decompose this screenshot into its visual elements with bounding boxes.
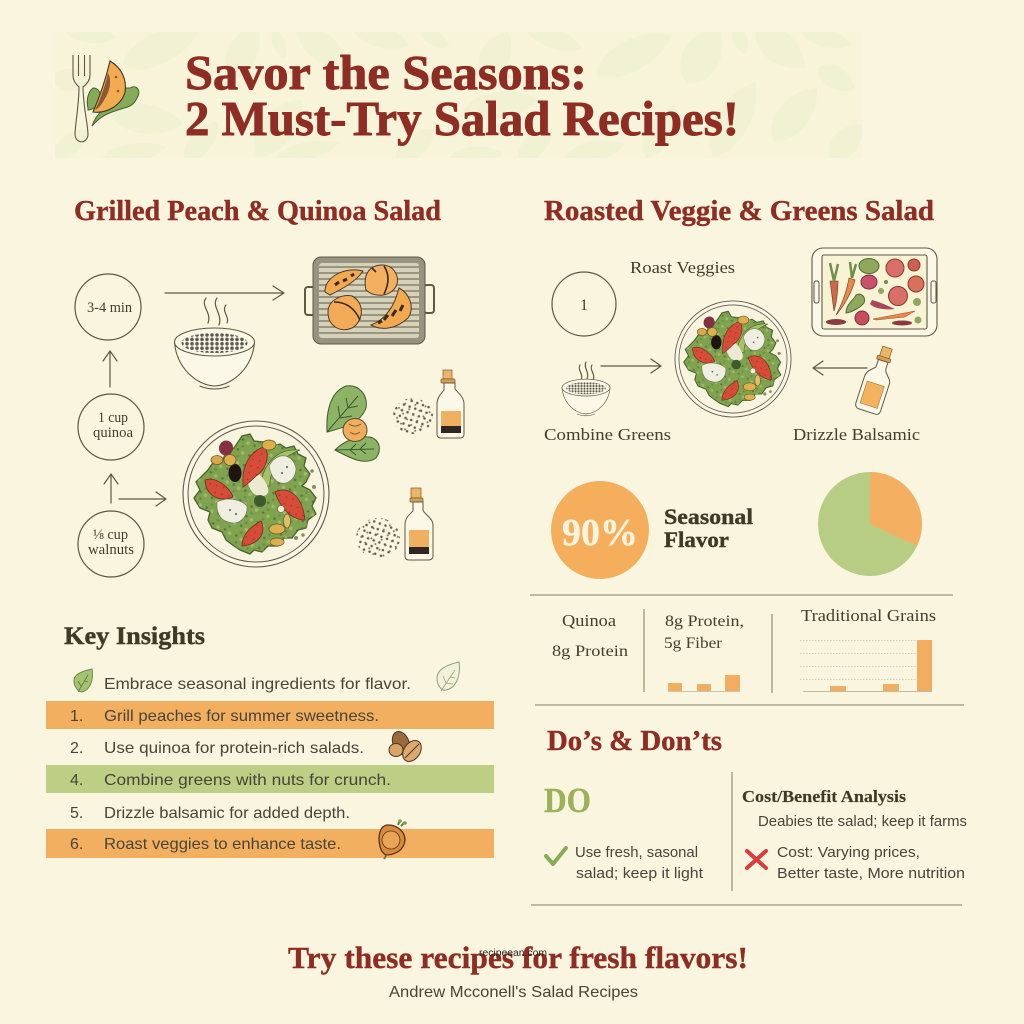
icon: steaming quinoa bowl — [174, 298, 254, 389]
title: Savor the Seasons: — [185, 45, 587, 100]
step circle: 3-4 min — [75, 274, 141, 340]
icon: small quinoa bowl — [562, 362, 610, 416]
arrow: bottle to plate — [813, 361, 867, 375]
row bar: combine greens — [46, 765, 494, 793]
stat: 90% seasonal flavor: Flavor — [664, 527, 729, 552]
footer headline: Try these recipes for fresh flavors! — [288, 940, 748, 975]
insight 2: 2. — [70, 740, 83, 757]
protein and fiber column with bars: 5g Fiber — [664, 635, 723, 652]
insight 4: Combine greens with nuts for crunch. — [104, 772, 391, 789]
stat: 90% seasonal flavor: Seasonal — [664, 504, 753, 529]
step circle: 1 — [552, 272, 616, 336]
quinoa column: Quinoa — [562, 611, 616, 630]
insight 5: Drizzle balsamic for added depth. — [104, 805, 350, 822]
step circle: 1 cup quinoa — [78, 394, 144, 460]
traditional grains bar chart — [800, 606, 936, 692]
step circle: 1 cup quinoa: quinoa — [93, 425, 134, 441]
title — [185, 45, 739, 146]
step circle: walnuts — [78, 511, 144, 577]
arrow: up to 3-4 min — [103, 351, 117, 387]
key insights list — [46, 676, 494, 858]
protein and fiber column with bars: 8g Protein, — [665, 613, 744, 630]
icon: green leaf — [74, 669, 93, 692]
icon: fork with peach slice and greens — [73, 55, 139, 142]
header leaf band — [55, 32, 862, 158]
icon: balsamic bottle bottom — [405, 488, 433, 560]
icon: outline leaf — [437, 662, 459, 691]
footer credit: Andrew Mcconell's Salad Recipes — [389, 984, 638, 1001]
insight 6: Roast veggies to enhance taste. — [104, 836, 341, 853]
arrow: to griddle — [165, 286, 284, 300]
protein and fiber column with bars — [664, 613, 744, 692]
do column: DO — [544, 781, 591, 820]
cost benefit column — [742, 787, 967, 882]
icon: leaves and nut — [327, 386, 379, 461]
traditional grains bar chart: Traditional Grains — [801, 606, 936, 625]
do column — [544, 781, 703, 882]
step circle: walnuts: walnuts — [88, 542, 134, 558]
label: drizzle balsamic: Drizzle Balsamic — [793, 425, 920, 444]
row bar: grill peaches — [46, 701, 494, 729]
insight 6: 6. — [70, 836, 83, 853]
heading: grilled peach salad: Grilled Peach & Quinoa Salad — [74, 196, 441, 227]
cost benefit column: Better taste, More nutrition — [777, 866, 965, 882]
cost benefit column: Cost: Varying prices, — [777, 845, 920, 861]
title: 2 Must-Try Salad Recipes! — [185, 91, 739, 146]
insight 4: 4. — [70, 772, 83, 789]
arrow: up to quinoa — [104, 474, 118, 503]
stat: 90% seasonal flavor — [551, 481, 753, 579]
icon: roasted vegetable — [379, 819, 407, 859]
step circle: 3-4 min: 3-4 min — [87, 300, 133, 316]
cost benefit column: Cost/Benefit Analysis — [742, 787, 906, 806]
icon: drizzle bottle — [854, 344, 900, 415]
label: roast veggies: Roast Veggies — [630, 258, 735, 277]
icon: almonds — [389, 729, 425, 765]
row bar: roast veggies — [46, 829, 494, 858]
insight: seasonal ingredients: Embrace seasonal ingredients for flavor. — [104, 676, 411, 693]
stat: 90% seasonal flavor: 90% — [562, 512, 638, 554]
step circle: 1 cup quinoa: 1 cup — [98, 410, 128, 426]
cost benefit column: Deabies tte salad; keep it farms — [758, 814, 967, 830]
icon: main salad plate — [183, 421, 329, 567]
arrow: to plate — [119, 492, 166, 506]
label: combine greens: Combine Greens — [544, 425, 671, 444]
icon: griddle with grilled peaches — [305, 257, 434, 344]
do column: salad; keep it light — [576, 866, 703, 882]
heading: dos and donts: Do’s & Don’ts — [547, 725, 722, 757]
arrow: bowl to plate — [601, 359, 661, 373]
quinoa column — [552, 611, 628, 660]
heading: key insights: Key Insights — [64, 623, 205, 650]
do column: Use fresh, sasonal — [575, 845, 698, 861]
heading: roasted veggie salad: Roasted Veggie & Greens Salad — [544, 196, 934, 227]
step circle: 1: 1 — [580, 297, 588, 314]
insight 5: 5. — [70, 805, 83, 822]
icon: seed pile bottom — [356, 518, 400, 558]
icon: second salad plate — [675, 301, 791, 417]
insight 1: Grill peaches for summer sweetness. — [104, 708, 379, 725]
watermark: recipeean.com — [479, 948, 547, 959]
insight 1: 1. — [70, 708, 83, 725]
pie chart — [818, 472, 922, 576]
step circle: walnuts: ⅛ cup — [93, 527, 128, 543]
insight 2: Use quinoa for protein-rich salads. — [104, 740, 364, 757]
icon: balsamic bottle top — [437, 370, 464, 438]
divider — [530, 594, 953, 596]
icon: seed pile top — [393, 398, 433, 434]
quinoa column: 8g Protein — [552, 643, 628, 660]
icon: roasting tray with vegetables — [812, 248, 937, 336]
